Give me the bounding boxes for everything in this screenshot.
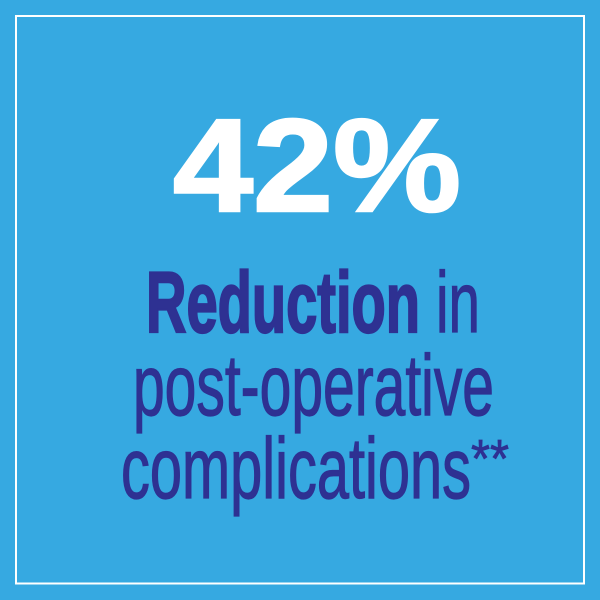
footnote asterisks: ** — [471, 429, 509, 489]
line 1: regular word: in — [436, 255, 480, 351]
line 1: bold word: Reduction — [146, 255, 420, 351]
headline statistic: 42% — [173, 92, 461, 239]
description text — [121, 255, 509, 517]
